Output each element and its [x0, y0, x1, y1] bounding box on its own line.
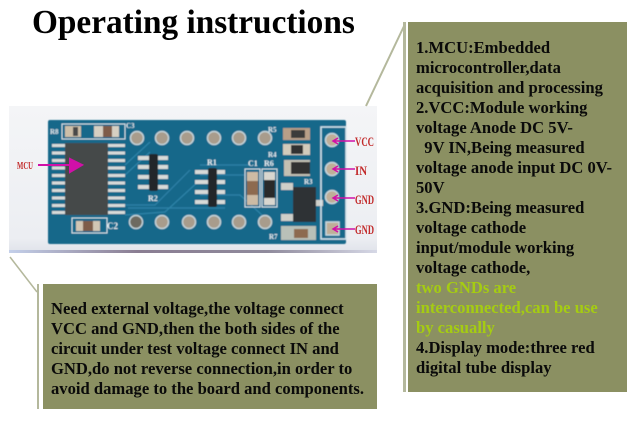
right-side components: R4 — [268, 151, 277, 159]
GND description: input/module working — [416, 238, 574, 257]
VCC description: 50V — [416, 178, 445, 197]
VCC description: 2.VCC:Module working — [416, 98, 587, 117]
MCU description — [416, 38, 603, 97]
MCU label and arrow — [17, 159, 82, 172]
panel: module description — [408, 22, 627, 392]
MCU description: 1.MCU:Embedded — [416, 38, 550, 57]
pin labels and arrows: IN — [355, 163, 368, 178]
R2 resistor array: R2 — [148, 194, 158, 203]
R1 resistor array — [195, 158, 225, 207]
right-side components: R3 — [304, 178, 313, 186]
GND description: voltage cathode — [416, 218, 526, 237]
pin labels and arrows — [333, 134, 374, 237]
pin labels and arrows: GND — [355, 222, 374, 237]
board — [48, 120, 346, 244]
header pins — [321, 127, 346, 239]
MCU chip — [52, 143, 125, 215]
display mode description: 4.Display mode:three red — [416, 338, 595, 357]
C1 and R6 components: R6 — [264, 159, 274, 168]
panel: usage note — [43, 284, 377, 409]
VCC description: 9V IN,Being measured — [424, 138, 585, 157]
connector line: bottom panel — [10, 257, 37, 292]
MCU label and arrow: MCU — [17, 161, 33, 172]
VCC description — [416, 98, 612, 197]
GND description — [416, 198, 584, 277]
GND note in green: two GNDs are — [416, 278, 516, 297]
display mode description: digital tube display — [416, 358, 552, 377]
C2 capacitor: C2 — [107, 221, 118, 231]
pin labels and arrows: GND — [355, 192, 374, 207]
panel: usage note: Need external voltage,the voltage connect — [51, 299, 344, 318]
top capacitors: C3 — [126, 122, 135, 130]
VCC description: voltage anode input DC 0V- — [416, 158, 612, 177]
display mode description — [416, 338, 595, 377]
right-side components — [268, 126, 323, 241]
GND note in green: by casually — [416, 318, 495, 337]
MCU description: microcontroller,data — [416, 58, 561, 77]
pin labels and arrows: VCC — [355, 134, 374, 149]
C1 and R6 components — [245, 159, 277, 207]
panel: usage note: VCC and GND,then the both sides of the — [51, 319, 340, 338]
connector line: right panel — [366, 24, 405, 106]
C2 capacitor — [72, 218, 118, 233]
bottom panel accent bar — [37, 284, 39, 409]
GND note in green: interconnected,can be use — [416, 298, 598, 317]
panel: usage note: circuit under test voltage connect IN and — [51, 339, 339, 358]
VCC description: voltage Anode DC 5V- — [416, 118, 573, 137]
MCU description: acquisition and processing — [416, 78, 603, 97]
panel: usage note: GND,do not reverse connection,in order to — [51, 359, 352, 378]
right-side components: R5 — [268, 126, 277, 134]
GND note in green — [416, 278, 598, 337]
right panel accent bar — [403, 22, 406, 392]
GND description: 3.GND:Being measured — [416, 198, 584, 217]
panel: usage note: avoid damage to the board and components. — [51, 379, 364, 398]
GND description: voltage cathode, — [416, 258, 530, 277]
top capacitors — [50, 122, 135, 139]
through-hole pads — [130, 132, 272, 228]
title: Operating instructions — [32, 4, 355, 41]
right-side components: R7 — [269, 233, 278, 241]
R2 resistor array — [138, 154, 168, 203]
C1 and R6 components: C1 — [248, 159, 258, 168]
R1 resistor array: R1 — [207, 158, 217, 167]
top capacitors: R8 — [50, 128, 59, 136]
